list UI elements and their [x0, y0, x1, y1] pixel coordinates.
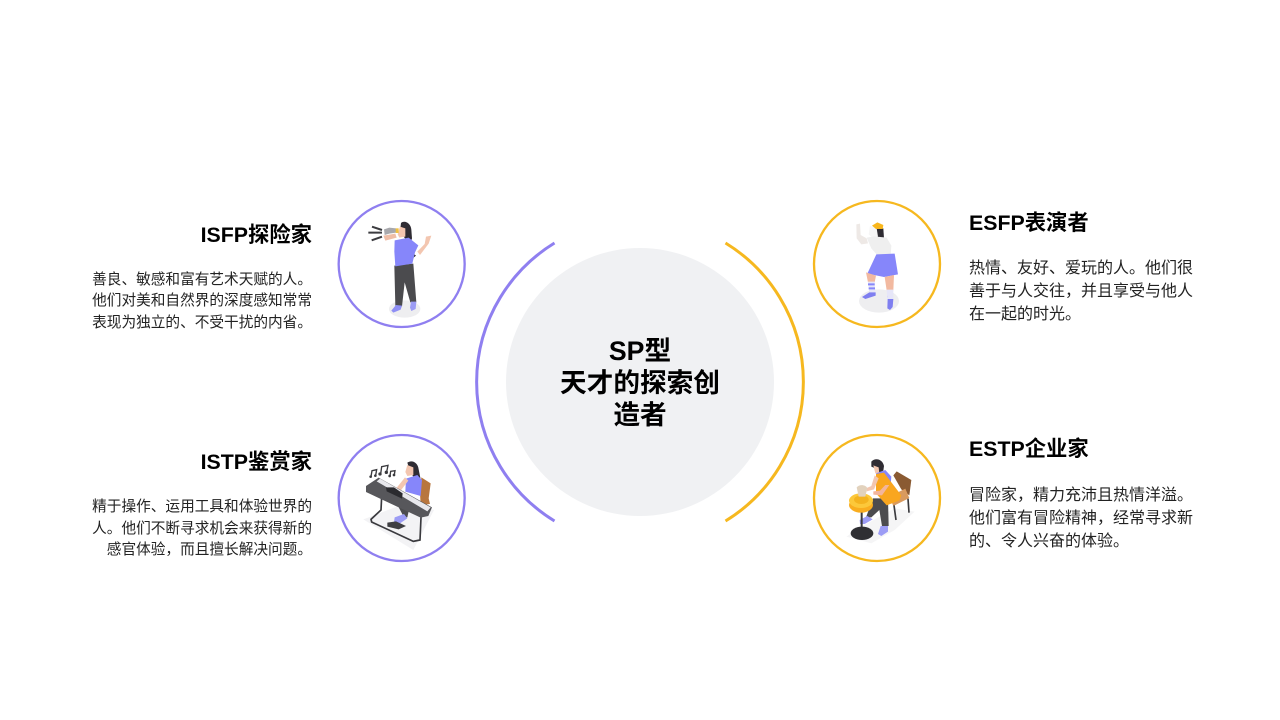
center title: 天才的探索创	[560, 368, 720, 398]
text: ISTP description: 精于操作、运用工具和体验世界的	[92, 499, 312, 515]
panel: ISFP	[92, 200, 466, 331]
yellow arc	[726, 243, 803, 521]
text: ESTP description: 的、令人兴奋的体验。	[969, 532, 1129, 550]
text: ESFP description: 热情、友好、爱玩的人。他们很	[969, 260, 1193, 276]
text: ISTP description	[92, 498, 312, 558]
text: ESTP description: 他们富有冒险精神，经常寻求新	[969, 510, 1193, 526]
central diagram: circle and arcs	[475, 242, 805, 522]
panel: ISTP	[92, 434, 466, 562]
text: ISTP description: 人。他们不断寻求机会来获得新的	[92, 520, 312, 536]
heading: ISTP: ISTP鉴赏家	[201, 450, 312, 474]
heading: ISFP: ISFP探险家	[201, 223, 312, 247]
center title	[560, 336, 720, 430]
heading: ESTP: ESTP企业家	[969, 437, 1089, 461]
icon: performer in mask	[812, 200, 942, 328]
center circle	[506, 248, 774, 516]
text: ESTP description: 冒险家，精力充沛且热情洋溢。	[969, 486, 1193, 504]
icon: potter at wheel	[812, 434, 942, 562]
text: ESFP description: 在一起的时光。	[969, 306, 1081, 322]
panel: ESTP	[812, 434, 1193, 562]
center title: SP型	[609, 336, 671, 366]
text: ISFP description: 他们对美和自然界的深度感知常常	[92, 293, 312, 309]
text: ESTP description	[969, 486, 1193, 550]
icon: woman playing keyboard	[338, 434, 466, 562]
panel: ESFP	[812, 200, 1193, 328]
text: ISFP description: 善良、敏感和富有艺术天赋的人。	[92, 272, 312, 288]
text: ISFP description: 表现为独立的、不受干扰的内省。	[92, 315, 312, 331]
text: ESFP description	[969, 259, 1193, 322]
heading: ESFP: ESFP表演者	[969, 211, 1089, 235]
purple arc	[477, 243, 554, 521]
center title: 造者	[613, 400, 667, 430]
icon: woman with megaphone	[338, 200, 466, 328]
text: ESFP description: 善于与人交往，并且享受与他人	[969, 282, 1193, 300]
text: ISTP description: 感官体验，而且擅长解决问题。	[107, 542, 312, 558]
text: ISFP description	[92, 271, 312, 331]
